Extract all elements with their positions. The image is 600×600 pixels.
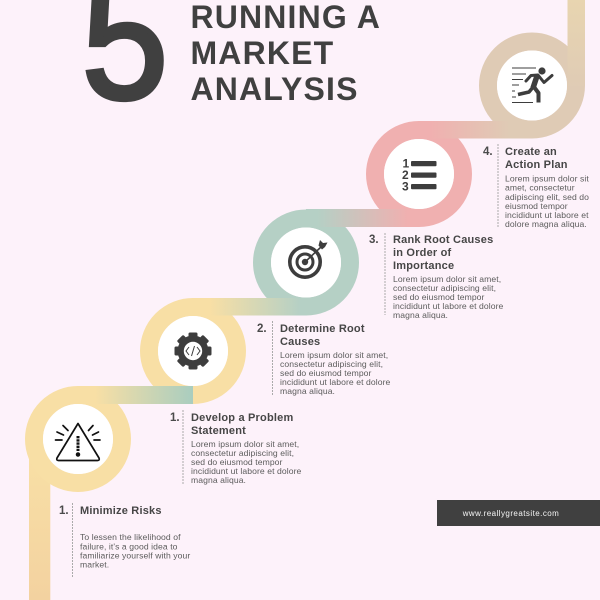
step: Minimize Risks: familiarize yourself with your: [80, 550, 190, 560]
step: Determine Root Causes: 2.: [257, 323, 267, 335]
step: Determine Root Causes: magna aliqua.: [280, 386, 335, 396]
step: Develop a Problem Statement: [170, 410, 302, 485]
step: Rank Root Causes in Order of Importance: 3.: [369, 234, 379, 246]
step: Minimize Risks: To lessen the likelihood of: [80, 532, 181, 542]
title: [190, 0, 381, 107]
footer website bar: [437, 500, 600, 526]
icon: warning triangle: [56, 424, 100, 460]
step: Determine Root Causes: [257, 321, 391, 396]
title: ANALYSIS: [190, 71, 359, 107]
icon: numbered list: [402, 156, 436, 194]
step: Create an Action Plan: 4.: [483, 146, 493, 158]
step: Create an Action Plan: Action Plan: [505, 159, 568, 171]
step: Develop a Problem Statement: sed do eiusmod tempor: [191, 457, 283, 467]
step: Develop a Problem Statement: consectetur adipiscing elit,: [191, 448, 294, 458]
step: Rank Root Causes in Order of Importance: consectetur adipiscing elit,: [393, 283, 496, 293]
icon: numbered list: 1: [402, 156, 410, 170]
step: Minimize Risks: 1.: [59, 505, 69, 517]
step: Rank Root Causes in Order of Importance: Importance: [393, 260, 454, 272]
step: Rank Root Causes in Order of Importance: Rank Root Causes: [393, 234, 493, 246]
step: Minimize Risks: [59, 503, 190, 578]
step: Create an Action Plan: incididunt ut labore et: [505, 210, 589, 220]
step: Determine Root Causes: sed do eiusmod tempor: [280, 368, 372, 378]
step: Create an Action Plan: eiusmod tempor: [505, 201, 568, 211]
title: RUNNING A: [190, 0, 381, 35]
icon: numbered list: 2: [402, 168, 409, 182]
icon: gear with code: [174, 332, 212, 370]
step: Create an Action Plan: Create an: [505, 146, 557, 158]
step: Determine Root Causes: incididunt ut labore et dolore: [280, 377, 391, 387]
step: Rank Root Causes in Order of Importance: sed do eiusmod tempor: [393, 292, 485, 302]
step: Rank Root Causes in Order of Importance: magna aliqua.: [393, 310, 448, 320]
step: Develop a Problem Statement: Lorem ipsum dolor sit amet,: [191, 439, 299, 449]
step: Determine Root Causes: consectetur adipiscing elit,: [280, 359, 383, 369]
step: Create an Action Plan: amet, consectetur: [505, 182, 575, 192]
step: Create an Action Plan: adipiscing elit, sed do: [505, 192, 589, 202]
icon: numbered list: 3: [402, 180, 409, 194]
step: Determine Root Causes: Determine Root: [280, 323, 365, 335]
step: Determine Root Causes: Lorem ipsum dolor sit amet,: [280, 350, 388, 360]
step: Develop a Problem Statement: incididunt ut labore et dolore: [191, 466, 302, 476]
icon: running person: [512, 67, 552, 102]
icon: target with arrow: [290, 240, 328, 277]
step: Create an Action Plan: Lorem ipsum dolor sit: [505, 174, 589, 184]
step: Minimize Risks: market.: [80, 560, 109, 570]
step: Rank Root Causes in Order of Importance: in Order of: [393, 247, 452, 259]
step: Determine Root Causes: Causes: [280, 336, 320, 348]
footer website bar: www.reallygreatsite.com: [462, 509, 559, 518]
step: Develop a Problem Statement: Develop a Problem: [191, 412, 293, 424]
step: Rank Root Causes in Order of Importance: incididunt ut labore et dolore: [393, 301, 504, 311]
step: Create an Action Plan: dolore magna aliqua.: [505, 219, 587, 229]
step: Develop a Problem Statement: Statement: [191, 425, 246, 437]
step: Minimize Risks: failure, it's a good idea to: [80, 542, 178, 552]
step: Create an Action Plan: [483, 144, 589, 229]
step: Rank Root Causes in Order of Importance: [369, 233, 504, 320]
step: Develop a Problem Statement: 1.: [170, 412, 180, 424]
step: Minimize Risks: Minimize Risks: [80, 505, 162, 517]
step: Develop a Problem Statement: magna aliqua.: [191, 475, 246, 485]
title: MARKET: [190, 35, 334, 71]
step: Rank Root Causes in Order of Importance: Lorem ipsum dolor sit amet,: [393, 274, 501, 284]
